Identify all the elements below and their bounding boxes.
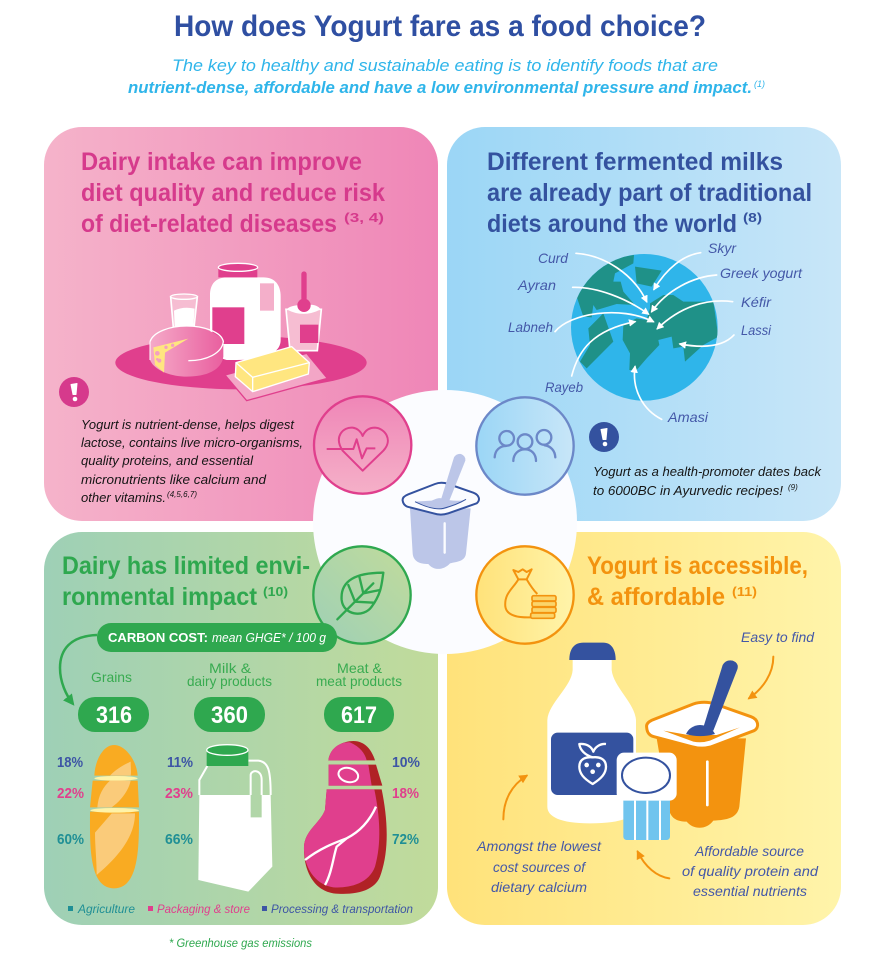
chart: globe with arrows bbox=[555, 253, 734, 419]
heading: accessible: Yogurt is accessible, bbox=[587, 552, 808, 580]
subtitle bbox=[128, 56, 765, 97]
chart: meat column: meat products bbox=[316, 673, 402, 689]
legend: Packaging & store bbox=[157, 902, 250, 916]
legend: Agriculture bbox=[77, 902, 135, 916]
labels: fermented milk names: Curd bbox=[538, 250, 569, 266]
heading: environmental impact: (10) bbox=[263, 584, 288, 599]
subtitle: nutrient-dense, affordable and have a low environmental pressure and impact. bbox=[128, 78, 752, 97]
heading: accessible: (11) bbox=[732, 584, 757, 599]
icon: money bag bbox=[476, 546, 574, 644]
chart: milk column: 360 bbox=[211, 702, 248, 729]
icon: exclamation bbox=[59, 377, 89, 407]
percentages: milk: 23% bbox=[165, 785, 193, 802]
percentages: meat bbox=[392, 754, 420, 848]
text: ayurvedic bbox=[593, 464, 822, 498]
footnote: * Greenhouse gas emissions bbox=[169, 936, 312, 950]
labels: yellow panel: of quality protein and bbox=[682, 863, 819, 879]
icon: milk jug bbox=[198, 745, 272, 892]
legend bbox=[68, 902, 413, 916]
heading: fermented milks: are already part of traditional bbox=[487, 179, 812, 207]
labels: fermented milk names: Skyr bbox=[708, 240, 737, 256]
percentages: grains: 22% bbox=[57, 785, 84, 802]
heading: fermented milks: diets around the world bbox=[487, 210, 737, 238]
heading: dairy intake: of diet-related diseases bbox=[81, 210, 337, 238]
heading: dairy intake bbox=[81, 148, 385, 238]
chart: grains column: Grains bbox=[91, 669, 132, 685]
panel: fermented milks bbox=[447, 127, 841, 521]
icon: meat bbox=[304, 741, 387, 894]
illustration: dairy products bbox=[115, 263, 367, 401]
text: ayurvedic: (9) bbox=[788, 483, 798, 492]
text: yogurt nutrient-dense: other vitamins. bbox=[81, 490, 166, 505]
percentages: grains: 60% bbox=[57, 831, 84, 848]
chart: milk column bbox=[165, 660, 272, 892]
percentages: meat: 10% bbox=[392, 754, 420, 771]
illustration: bottle and yogurts bbox=[547, 643, 758, 840]
icon: heart bbox=[314, 396, 411, 494]
percentages: grains: 18% bbox=[57, 754, 83, 771]
legend: Processing & transportation bbox=[271, 902, 413, 916]
chart: meat column bbox=[304, 660, 420, 894]
chart: meat column: Meat & bbox=[337, 660, 383, 676]
chart: grains column: 316 bbox=[96, 702, 132, 729]
heading: dairy intake: (3, 4) bbox=[344, 210, 384, 225]
arrows: yellow panel bbox=[503, 657, 773, 878]
labels: yellow panel: dietary calcium bbox=[491, 879, 587, 895]
icon: central yogurt bbox=[403, 454, 479, 569]
labels: fermented milk names bbox=[508, 240, 803, 425]
callout: carbon cost: CARBON COST: bbox=[108, 630, 208, 645]
icon: exclamation bbox=[589, 422, 619, 452]
heading: dairy intake: Dairy intake can improve bbox=[81, 148, 362, 176]
chart: grains column bbox=[57, 669, 149, 888]
labels: yellow panel: Easy to find bbox=[741, 629, 815, 645]
labels: fermented milk names: Ayran bbox=[517, 277, 556, 293]
percentages: milk bbox=[165, 754, 193, 848]
chart: meat column: 617 bbox=[341, 702, 377, 729]
callout: carbon cost bbox=[97, 623, 337, 652]
labels: yellow panel bbox=[476, 629, 819, 899]
heading: dairy intake: diet quality and reduce risk bbox=[81, 179, 385, 207]
text: yogurt nutrient-dense: quality proteins, and essential bbox=[81, 453, 254, 468]
heading: fermented milks: Different fermented milks bbox=[487, 148, 783, 176]
heading: environmental impact bbox=[62, 552, 310, 611]
icon: bread bbox=[90, 745, 139, 888]
text: yogurt nutrient-dense: Yogurt is nutrient-dense, helps digest bbox=[81, 417, 295, 432]
title: How does Yogurt fare as a food choice? bbox=[174, 10, 706, 43]
subtitle: The key to healthy and sustainable eating is to identify foods that are bbox=[172, 56, 718, 75]
central white circle bbox=[313, 390, 577, 654]
percentages: meat: 72% bbox=[392, 831, 419, 848]
heading: fermented milks bbox=[487, 148, 812, 238]
icon: leaf bbox=[313, 546, 411, 644]
arrow: carbon cost to grains bbox=[60, 635, 97, 704]
labels: yellow panel: Amongst the lowest bbox=[476, 838, 602, 854]
callout: carbon cost: mean GHGE* / 100 g bbox=[212, 630, 327, 645]
heading: environmental impact: Dairy has limited envi- bbox=[62, 552, 310, 580]
heading: accessible bbox=[587, 552, 808, 611]
text: yogurt nutrient-dense bbox=[81, 417, 303, 505]
text: yogurt nutrient-dense: micronutrients like calcium and bbox=[81, 472, 267, 487]
labels: fermented milk names: Kéfir bbox=[741, 294, 772, 310]
heading: accessible: & affordable bbox=[587, 583, 725, 611]
icon: people bbox=[476, 397, 574, 495]
labels: yellow panel: cost sources of bbox=[493, 859, 587, 875]
chart: milk column: dairy products bbox=[187, 673, 272, 689]
labels: fermented milk names: Labneh bbox=[508, 319, 553, 335]
labels: yellow panel: essential nutrients bbox=[693, 883, 807, 899]
percentages: milk: 66% bbox=[165, 831, 193, 848]
subtitle: (1) bbox=[754, 79, 765, 89]
labels: fermented milk names: Amasi bbox=[667, 409, 709, 425]
labels: fermented milk names: Lassi bbox=[741, 322, 772, 338]
chart: milk column: Milk & bbox=[209, 660, 252, 676]
text: ayurvedic: Yogurt as a health-promoter dates back bbox=[593, 464, 822, 479]
percentages: meat: 18% bbox=[392, 785, 419, 802]
panel: accessible bbox=[447, 532, 841, 925]
text: yogurt nutrient-dense: (4,5,6,7) bbox=[167, 490, 197, 499]
panel: environmental impact bbox=[44, 532, 438, 925]
text: yogurt nutrient-dense: lactose, contains live micro-organisms, bbox=[81, 435, 303, 450]
text: ayurvedic: to 6000BC in Ayurvedic recipes! bbox=[593, 483, 783, 498]
percentages: grains bbox=[57, 754, 84, 848]
percentages: milk: 11% bbox=[167, 754, 193, 771]
labels: fermented milk names: Rayeb bbox=[545, 379, 583, 395]
panel: dairy intake bbox=[44, 127, 438, 521]
labels: yellow panel: Affordable source bbox=[694, 843, 804, 859]
labels: fermented milk names: Greek yogurt bbox=[720, 265, 803, 281]
heading: fermented milks: (8) bbox=[743, 210, 762, 225]
heading: environmental impact: ronmental impact bbox=[62, 583, 258, 611]
